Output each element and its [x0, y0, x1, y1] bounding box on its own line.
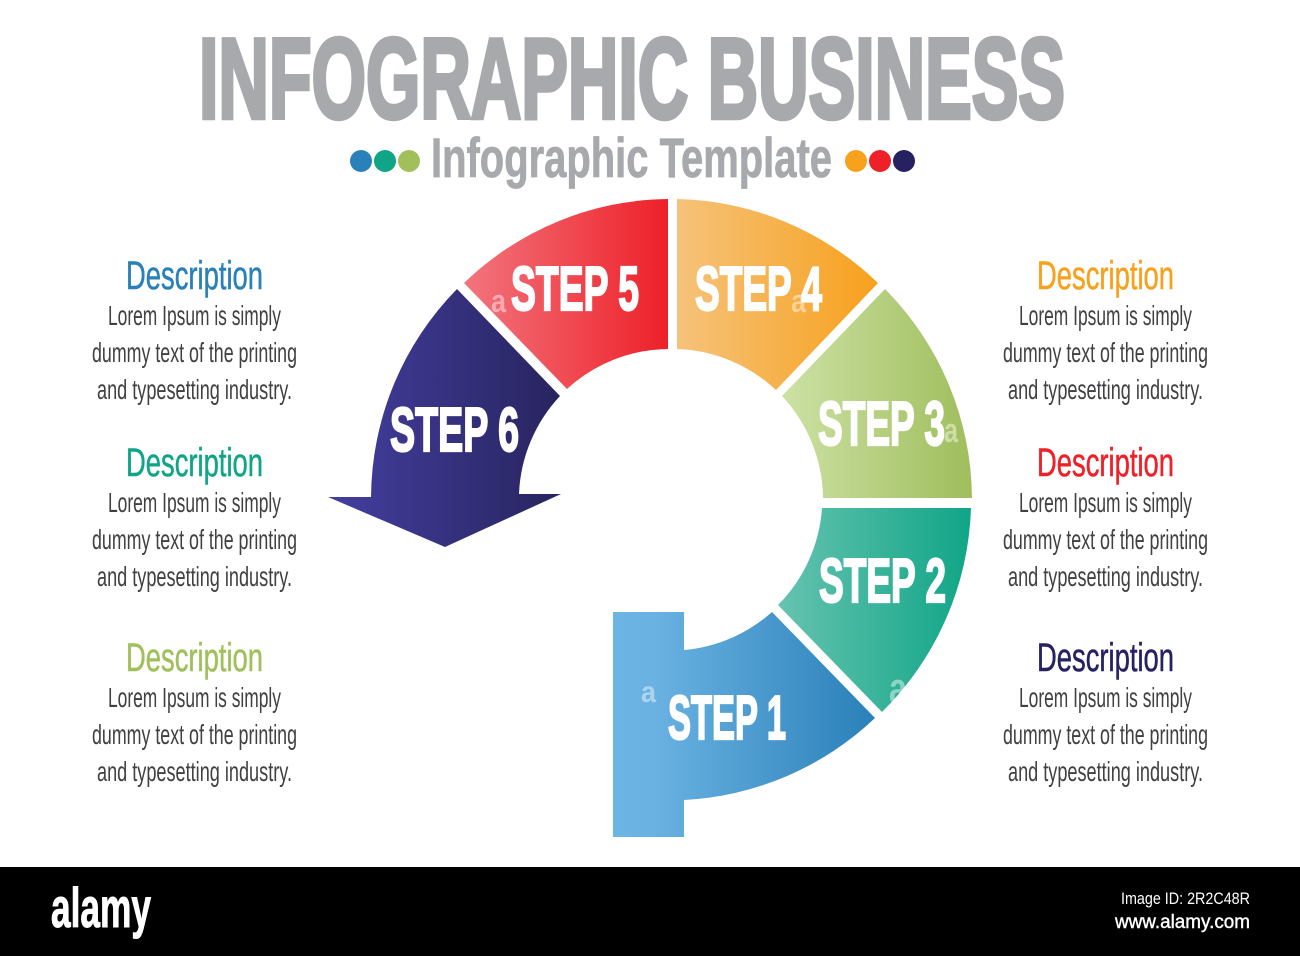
- description: left 3: Lorem Ipsum is simply: [108, 682, 281, 713]
- segment: step 3: a: [944, 412, 959, 450]
- footer bar: [0, 867, 1300, 956]
- footer bar: alamy: [51, 876, 151, 939]
- description: left 1: and typesetting industry.: [97, 374, 292, 405]
- decorative dots: right: [845, 150, 915, 172]
- description: right 2: [1003, 441, 1208, 592]
- description: left 2: and typesetting industry.: [97, 561, 292, 592]
- description: left 2: dummy text of the printing: [92, 524, 297, 555]
- description: right 2: Description: [1037, 441, 1174, 485]
- decorative dots: left: [350, 150, 420, 172]
- description: left 1: Description: [126, 254, 263, 298]
- segment: step 4: STEP 4: [695, 255, 822, 324]
- segment: step 4: [677, 199, 878, 390]
- footer bar: Image ID: 2R2C48R: [1121, 889, 1250, 908]
- description: left 3: and typesetting industry.: [97, 756, 292, 787]
- segment: step 3: STEP 3: [818, 390, 945, 459]
- description: left 2: Lorem Ipsum is simply: [108, 487, 281, 518]
- segment: step 1: [613, 612, 875, 837]
- description: left 3: Description: [126, 636, 263, 680]
- segment: step 5: a: [491, 283, 506, 319]
- description: right 3: Description: [1037, 636, 1174, 680]
- description: left 3: [92, 636, 297, 787]
- description: right 3: Lorem Ipsum is simply: [1019, 682, 1192, 713]
- description: left 3: dummy text of the printing: [92, 719, 297, 750]
- segment: step 3: [782, 289, 972, 498]
- segment: step 5: STEP 5: [511, 255, 639, 324]
- segment: step 6 arrow: [328, 289, 561, 547]
- segment: step 5: [464, 199, 668, 389]
- segment: step 6 arrow: STEP 6: [390, 396, 519, 465]
- segment: step 2: STEP 2: [819, 547, 946, 616]
- segment: step 4: a: [791, 283, 806, 319]
- footer bar: www.alamy.com: [1114, 912, 1250, 933]
- segment: step 1: a: [641, 676, 656, 709]
- description: left 1: [92, 254, 297, 405]
- description: right 1: Description: [1037, 254, 1174, 298]
- subtitle: Infographic Template: [431, 126, 832, 189]
- segment: step 2: [778, 508, 971, 713]
- description: right 1: [1003, 254, 1208, 405]
- description: left 1: dummy text of the printing: [92, 337, 297, 368]
- description: left 2: [92, 441, 297, 592]
- segment: step 2: a: [889, 664, 907, 713]
- description: right 2: Lorem Ipsum is simply: [1019, 487, 1192, 518]
- description: left 2: Description: [126, 441, 263, 485]
- segment: step 1: STEP 1: [668, 684, 786, 753]
- description: right 3: [1003, 636, 1208, 787]
- description: right 1: Lorem Ipsum is simply: [1019, 300, 1192, 331]
- description: left 1: Lorem Ipsum is simply: [108, 300, 281, 331]
